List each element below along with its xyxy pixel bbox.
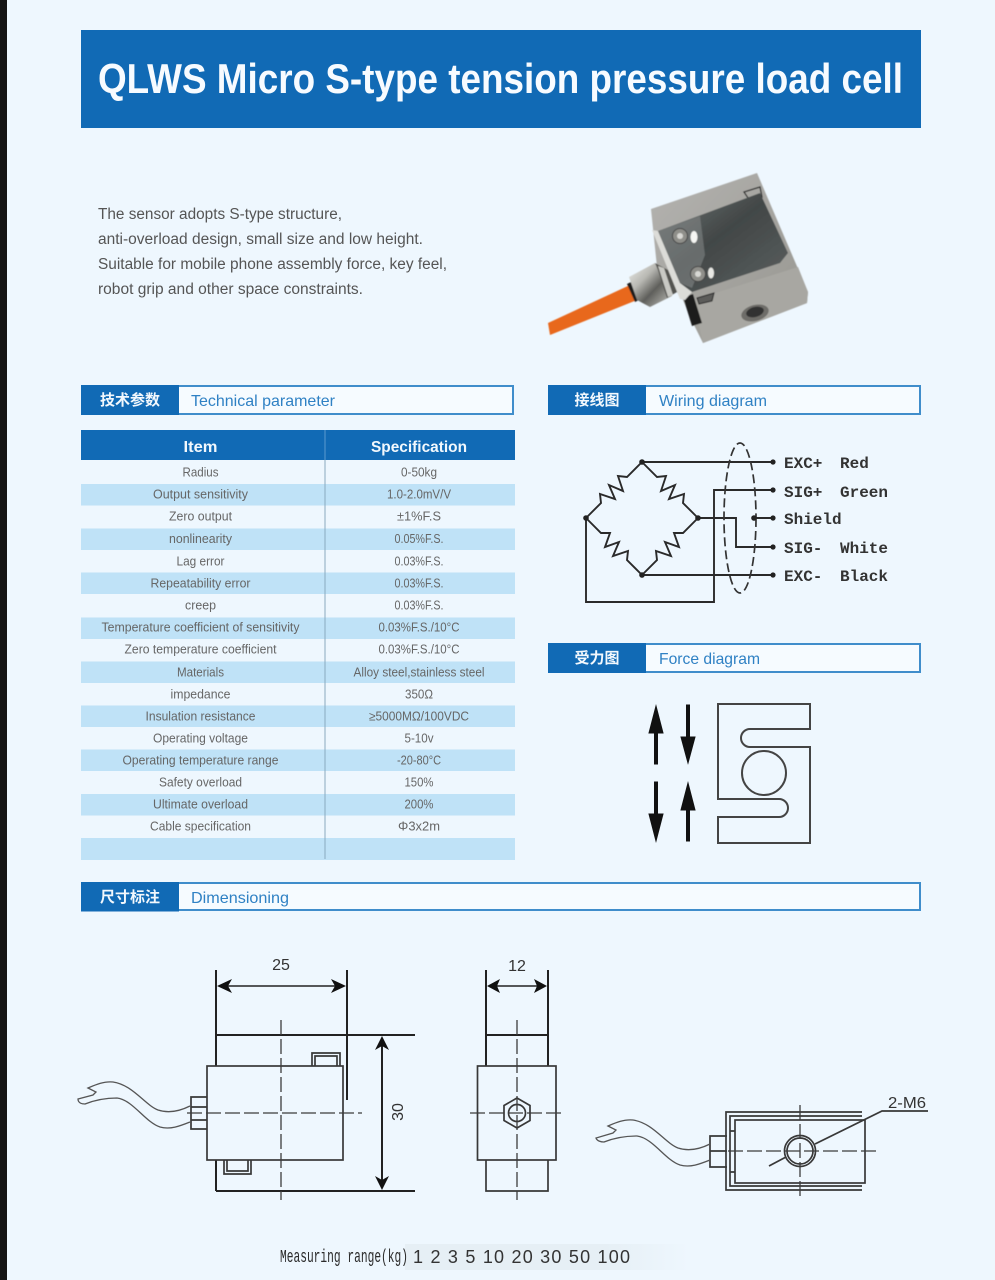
section header: wiring diagram: Wiring diagram	[659, 393, 767, 410]
item column: Temperature coefficient of sensitivity	[102, 620, 300, 634]
hole leader	[815, 1111, 928, 1144]
center lines	[516, 1020, 518, 1200]
specification column: ±1%F.S	[397, 510, 441, 524]
cable	[78, 1082, 190, 1128]
screws	[672, 228, 688, 244]
wire labels	[784, 455, 888, 586]
dimension drawing: front view	[470, 958, 563, 1200]
specification column: Φ3x2m	[398, 820, 440, 834]
specification column: 0.03%F.S./10°C	[378, 620, 460, 634]
section header: technical parameter: Technical parameter	[191, 393, 336, 410]
force arrows	[649, 705, 695, 841]
center lines	[280, 1020, 282, 1200]
specification column: Alloy steel,stainless steel	[354, 666, 484, 680]
dimension value: 12	[508, 958, 526, 975]
force diagram	[649, 704, 810, 843]
measuring range: 1 2 3 5 10 20 30 50 100	[413, 1247, 630, 1267]
item column: Output sensitivity	[153, 488, 249, 502]
item column: Lag error	[176, 554, 224, 568]
dimension drawing: top view	[596, 1095, 928, 1198]
section header: dimensioning: Dimensioning	[191, 890, 289, 907]
item column: Radius	[182, 466, 218, 480]
specification table: Specification	[371, 439, 467, 456]
dimension arrows	[217, 979, 389, 1190]
item column: Repeatability error	[150, 576, 250, 590]
specification column: 0.03%F.S.	[394, 554, 444, 568]
specification column: 150%	[404, 776, 434, 790]
junction dots	[583, 459, 776, 578]
metal plate edge	[652, 230, 692, 300]
item column: Zero temperature coefficient	[124, 642, 277, 656]
wire labels: Green	[840, 484, 888, 502]
cable nut	[629, 263, 672, 307]
specification column: 0-50kg	[401, 466, 437, 480]
item column: Operating voltage	[153, 732, 248, 746]
table bands	[81, 484, 515, 860]
intro text block	[98, 206, 447, 298]
wire labels: SIG+	[784, 484, 822, 502]
body	[207, 1066, 343, 1160]
product photo: load cell	[548, 173, 808, 343]
threaded hole	[784, 1136, 816, 1166]
dimension drawing: side view	[78, 957, 415, 1200]
section header: wiring diagram	[548, 385, 920, 415]
left dark edge	[0, 0, 7, 1280]
section header: technical parameter	[81, 385, 513, 415]
specification column: 350Ω	[405, 688, 433, 702]
section header: force diagram: 受力图	[574, 649, 620, 667]
S-beam hole	[742, 751, 786, 795]
wire labels: White	[840, 540, 888, 558]
connector	[710, 1136, 727, 1167]
intro text block: robot grip and other space constraints.	[98, 281, 363, 298]
title banner	[81, 30, 921, 128]
connector	[191, 1097, 207, 1129]
specification column: 200%	[404, 798, 434, 812]
measuring range	[280, 1244, 690, 1270]
specification table: Item	[184, 439, 218, 456]
item column: Zero output	[169, 510, 233, 524]
specification column: 5-10v	[404, 732, 434, 746]
hole callout: 2-M6	[888, 1095, 926, 1112]
intro text block: The sensor adopts S-type structure,	[98, 206, 342, 223]
shield ellipse	[724, 443, 756, 593]
wire labels: EXC+	[784, 455, 822, 473]
specification column: 0.03%F.S.	[394, 598, 444, 612]
section header: force diagram	[548, 643, 920, 673]
dimension arrows	[487, 979, 547, 993]
wires	[586, 462, 773, 602]
section header: dimensioning	[81, 882, 920, 912]
item column	[102, 466, 300, 834]
item column: Materials	[177, 666, 224, 680]
wire labels: Shield	[784, 511, 842, 529]
dimension drawing: side view: 30	[390, 1103, 407, 1121]
metal plate	[658, 193, 788, 292]
section header: technical parameter: 技术参数	[100, 391, 160, 409]
title: QLWS Micro S-type tension pressure load cell	[98, 55, 903, 102]
wire labels: EXC-	[784, 568, 822, 586]
item column: Operating temperature range	[122, 754, 279, 768]
inner body	[735, 1120, 865, 1183]
specification column: -20-80°C	[397, 754, 441, 768]
threaded hole	[739, 302, 771, 324]
wire labels: Black	[840, 568, 888, 586]
cable	[596, 1120, 710, 1166]
item column: nonlinearity	[169, 532, 233, 546]
wire labels: Red	[840, 455, 869, 473]
specification column: 0.05%F.S.	[394, 532, 444, 546]
specification column: 0.03%F.S./10°C	[378, 642, 460, 656]
cable	[548, 285, 637, 335]
hex fitting	[504, 1098, 530, 1128]
item column: Insulation resistance	[146, 710, 256, 724]
dimension values: 25	[272, 957, 290, 974]
table header	[81, 430, 515, 460]
item column: creep	[185, 598, 216, 612]
item column: Safety overload	[159, 776, 242, 790]
bridge resistors	[586, 462, 698, 575]
center lines	[799, 1105, 801, 1198]
bracket	[726, 1112, 862, 1190]
S-beam outline	[718, 704, 810, 843]
measuring range: Measuring range(kg)	[280, 1248, 408, 1268]
specification column: 1.0-2.0mV/V	[387, 488, 452, 502]
body	[478, 1066, 556, 1160]
specification column	[354, 466, 484, 834]
item column: Ultimate overload	[153, 798, 248, 812]
tabs	[312, 1053, 340, 1066]
wire labels: SIG-	[784, 540, 822, 558]
section header: force diagram: Force diagram	[659, 651, 760, 668]
wiring diagram	[583, 443, 888, 602]
section header: wiring diagram: 接线图	[574, 391, 620, 409]
intro text block: anti-overload design, small size and low height.	[98, 231, 423, 248]
steel body	[651, 173, 808, 343]
specification column: 0.03%F.S.	[394, 576, 444, 590]
item column: impedance	[170, 688, 231, 702]
specification table	[81, 430, 515, 860]
section header: dimensioning: 尺寸标注	[100, 888, 160, 906]
specification column: ≥5000MΩ/100VDC	[369, 710, 469, 724]
item column: Cable specification	[150, 820, 251, 834]
intro text block: Suitable for mobile phone assembly force, key feel,	[98, 256, 447, 273]
bracket ticks	[730, 1131, 735, 1172]
